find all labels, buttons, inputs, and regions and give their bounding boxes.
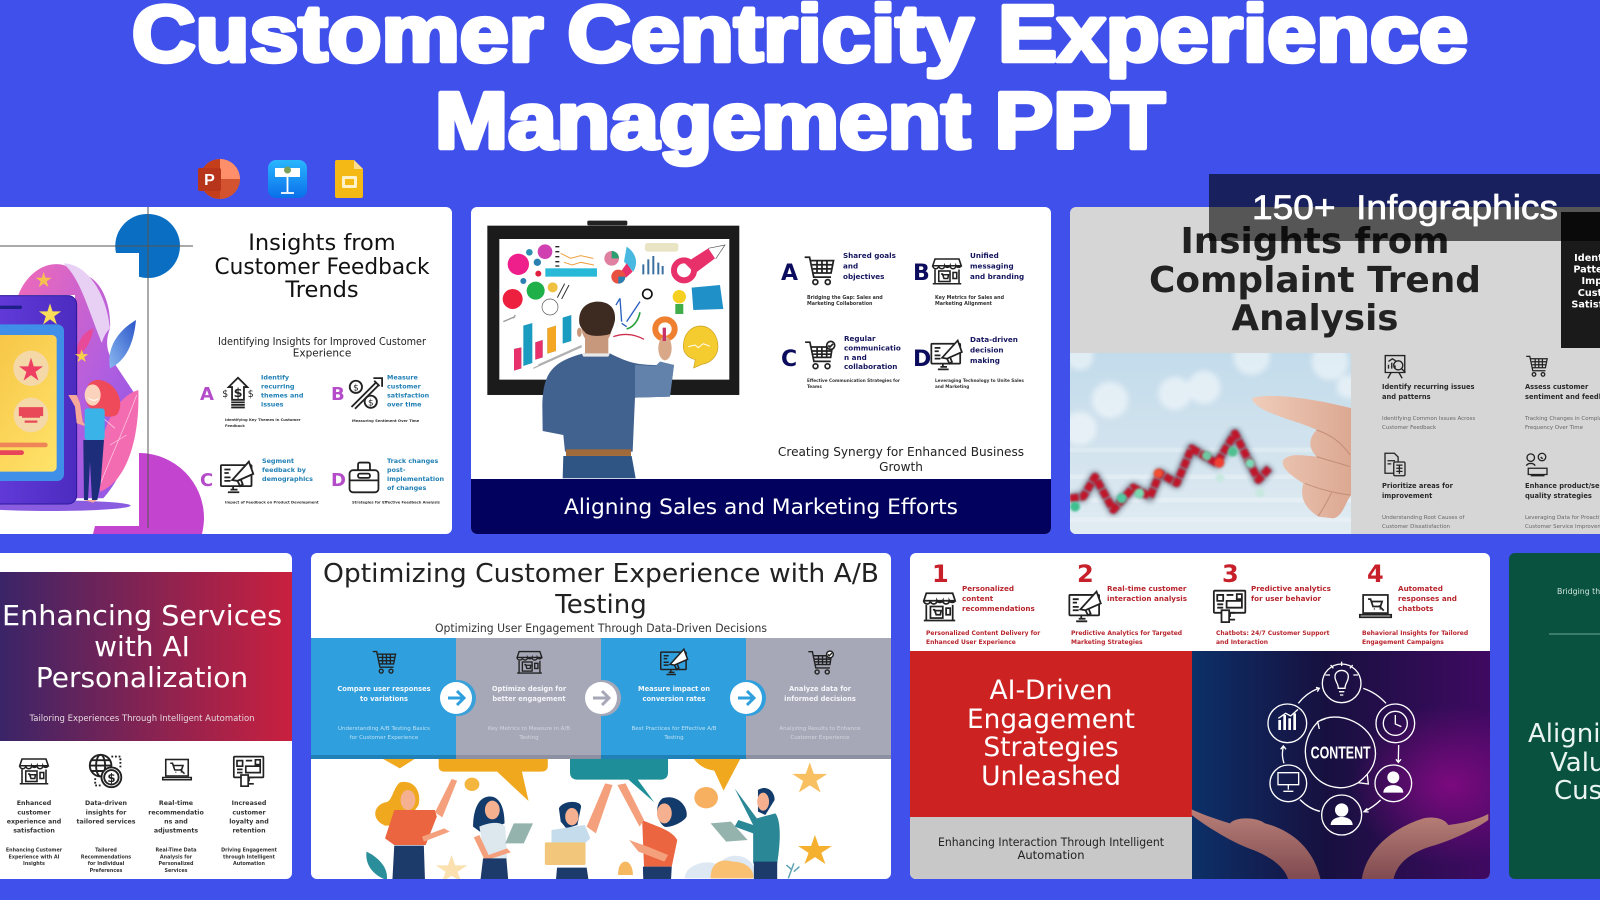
item: prioritize areas: Customer Dissatisfaction bbox=[1382, 524, 1450, 530]
item D: decision bbox=[970, 346, 1004, 354]
decorative blue quarter shape bbox=[115, 214, 180, 278]
column: customer loyalty: retention bbox=[232, 828, 266, 834]
item B: Measuring Sentiment Over Time bbox=[352, 419, 420, 423]
item B: B bbox=[331, 384, 345, 405]
icon: Keynote bbox=[268, 160, 307, 198]
heading: Customer Feedback bbox=[214, 254, 430, 280]
photo: content cycle over hands bbox=[1192, 651, 1550, 880]
item C bbox=[200, 457, 319, 504]
column: customer loyalty: Driving Engagement bbox=[221, 848, 278, 854]
column: data-driven insights: Tailored bbox=[95, 848, 117, 854]
item: assess customer sentiment bbox=[1524, 356, 1600, 431]
item: prioritize areas: Understanding Root Causes of bbox=[1382, 515, 1465, 521]
step 4 bbox=[746, 638, 891, 759]
step 2: Testing bbox=[518, 735, 539, 741]
heading bbox=[323, 559, 879, 620]
arrow 2 bbox=[585, 680, 621, 716]
step 2: Real-time customer bbox=[1107, 584, 1187, 593]
column: real-time recommendations bbox=[148, 760, 204, 874]
step 2: Key Metrics to Measure in A/B bbox=[488, 726, 570, 732]
item B: B bbox=[913, 261, 930, 286]
item D: D bbox=[913, 347, 931, 372]
step 2 bbox=[456, 638, 601, 759]
subtitle: Optimizing User Engagement Through Data-Driven Decisions bbox=[435, 621, 767, 635]
column: customer experience bbox=[6, 759, 63, 867]
item A: and bbox=[843, 262, 858, 270]
step 4: Behavioral Insights for Tailored bbox=[1362, 630, 1468, 637]
item C: feedback by bbox=[262, 466, 307, 474]
item D: post- bbox=[387, 466, 406, 474]
column: customer experience: customer bbox=[17, 810, 52, 816]
step 4: 4 bbox=[1367, 560, 1384, 588]
column: customer experience: Experience with AI bbox=[9, 854, 60, 860]
column: data-driven insights: insights for bbox=[86, 810, 127, 816]
item A: Feedback bbox=[225, 424, 245, 428]
item C: Effective Communication Strategies for bbox=[807, 378, 901, 383]
step 4: Analyze data for bbox=[789, 685, 852, 693]
black side box bbox=[1561, 212, 1600, 348]
red title block: Unleashed bbox=[981, 761, 1121, 792]
step 1: to variations bbox=[360, 695, 408, 703]
item C: n and bbox=[844, 353, 867, 362]
column: customer loyalty: through Intelligent bbox=[223, 854, 276, 860]
item C: Segment bbox=[262, 457, 294, 465]
step 2: Marketing Strategies bbox=[1071, 639, 1143, 646]
subtitle bbox=[778, 446, 1024, 471]
heading bbox=[4, 604, 281, 688]
red title block: Engagement bbox=[967, 704, 1135, 735]
panel: aligning value (cropped) bbox=[1509, 553, 1600, 879]
banner: 150+ infographics: 150+ Infographics bbox=[1252, 189, 1558, 227]
step 1 bbox=[311, 638, 456, 759]
step 1: Compare user responses bbox=[337, 685, 431, 693]
item A: A bbox=[781, 261, 798, 286]
item A: Bridging the Gap: Sales and bbox=[807, 295, 883, 301]
step 1: for Customer Experience bbox=[350, 735, 419, 741]
icon: PowerPoint bbox=[198, 159, 240, 199]
column: customer experience: Enhancing Customer bbox=[6, 848, 63, 854]
item B: Unified bbox=[970, 251, 999, 260]
column: real-time recommendations: recommendatio bbox=[148, 810, 204, 816]
item A bbox=[781, 251, 896, 307]
column: customer experience: Insights bbox=[23, 861, 45, 867]
heading: Personalization bbox=[36, 661, 248, 694]
panel: A/B testing bbox=[311, 553, 891, 882]
footer bar bbox=[471, 479, 1051, 534]
heading: Insights from bbox=[248, 230, 396, 256]
column: customer experience: experience and bbox=[7, 818, 61, 826]
item B: customer bbox=[387, 382, 422, 390]
item: enhance product quality bbox=[1525, 453, 1600, 530]
item B: messaging bbox=[970, 262, 1014, 270]
subtitle: Growth bbox=[879, 460, 923, 474]
heading: Enhancing Services bbox=[2, 599, 282, 632]
icon: Google Slides bbox=[335, 160, 363, 198]
step 3: conversion rates bbox=[642, 695, 706, 703]
item C: communicatio bbox=[844, 344, 901, 352]
item D bbox=[331, 457, 444, 504]
arrow 1 bbox=[440, 680, 476, 716]
gradient header band bbox=[0, 572, 292, 741]
illustration: man at whiteboard bbox=[487, 221, 739, 478]
column: data-driven insights: for Individual bbox=[88, 861, 125, 867]
column: customer experience: Enhanced bbox=[17, 800, 51, 807]
heading bbox=[1528, 719, 1600, 806]
step 3: Testing bbox=[663, 735, 684, 741]
heading: Testing bbox=[554, 590, 647, 620]
format icons row bbox=[198, 159, 363, 199]
column: real-time recommendations: Services bbox=[164, 868, 188, 874]
step 3: Measure impact on bbox=[638, 685, 710, 693]
step 3 bbox=[601, 638, 746, 759]
item B: Measure bbox=[387, 374, 419, 382]
step 1: Personalized bbox=[962, 584, 1014, 593]
item D: of changes bbox=[387, 484, 427, 492]
item D: implementation bbox=[387, 475, 444, 483]
column: real-time recommendations: ns and bbox=[164, 818, 188, 826]
item D: Data-driven bbox=[970, 335, 1018, 344]
item D: Leveraging Technology to Unite Sales bbox=[935, 378, 1024, 383]
step 3: for user behavior bbox=[1251, 594, 1322, 603]
column: customer experience: satisfaction bbox=[13, 828, 55, 834]
column: customer loyalty: Automation bbox=[233, 861, 265, 867]
column: data-driven insights: Recommendations bbox=[81, 854, 131, 860]
step 4: chatbots bbox=[1398, 604, 1433, 613]
item: identify recurring issues: Identifying Common Issues Across bbox=[1382, 416, 1475, 422]
item C: demographics bbox=[262, 475, 313, 483]
item: identify recurring issues: and patterns bbox=[1382, 393, 1431, 401]
step 3: Predictive analytics bbox=[1251, 584, 1331, 593]
item B: Key Metrics for Sales and bbox=[935, 295, 1005, 301]
title: Management PPT bbox=[435, 76, 1165, 165]
item B bbox=[913, 251, 1024, 307]
item D: Track changes bbox=[387, 457, 438, 465]
column: data-driven insights: Preferences bbox=[90, 868, 123, 874]
subtitle: Identifying Insights for Improved Customer bbox=[218, 336, 427, 348]
step 1 bbox=[924, 560, 1040, 646]
item C: C bbox=[781, 347, 797, 372]
column: customer loyalty: Increased bbox=[232, 800, 266, 807]
red title block bbox=[910, 651, 1192, 817]
red title block: Strategies bbox=[983, 732, 1119, 763]
step 1: recommendations bbox=[962, 604, 1035, 613]
item: identify recurring issues: Customer Feedback bbox=[1382, 425, 1437, 431]
item C bbox=[781, 334, 901, 389]
banner: 150+ infographics bbox=[1209, 174, 1600, 241]
column: data-driven insights bbox=[76, 755, 136, 874]
item A: objectives bbox=[843, 272, 884, 281]
step 4: Customer Experience bbox=[790, 735, 850, 741]
step 1: content bbox=[962, 594, 994, 603]
item D: D bbox=[331, 470, 346, 491]
heading: Analysis bbox=[1232, 298, 1398, 339]
item D: and Marketing bbox=[935, 384, 969, 389]
step 4 bbox=[1360, 560, 1468, 646]
item B: satisfaction bbox=[387, 392, 430, 400]
step 4: informed decisions bbox=[784, 695, 856, 703]
column: real-time recommendations: Real-time bbox=[159, 800, 193, 807]
item A: themes and bbox=[261, 392, 304, 400]
step 3 bbox=[1214, 560, 1331, 646]
item: assess customer sentiment: Frequency Over Time bbox=[1525, 425, 1584, 431]
step 1: Personalized Content Delivery for bbox=[926, 630, 1040, 637]
step 4: Analyzing Results to Enhance bbox=[779, 726, 861, 732]
item: identify recurring issues: Identify recurring issues bbox=[1382, 383, 1475, 391]
panel: complaint trend analysis bbox=[1063, 207, 1600, 537]
step 3: 3 bbox=[1222, 560, 1239, 588]
step 2: better engagement bbox=[492, 695, 566, 703]
photo: chart and pointing hand bbox=[1070, 353, 1351, 534]
decorative purple quarter shape bbox=[93, 453, 204, 534]
column: customer loyalty bbox=[221, 757, 278, 867]
item C: Regular bbox=[844, 334, 876, 343]
step 1: Understanding A/B Testing Basics bbox=[338, 726, 430, 732]
step 2: Optimize design for bbox=[492, 685, 567, 693]
item C: Teams bbox=[807, 384, 822, 389]
heading bbox=[216, 233, 430, 298]
step 4: Engagement Campaigns bbox=[1362, 639, 1444, 646]
step 3: Chatbots: 24/7 Customer Support bbox=[1216, 630, 1330, 637]
step 1: 1 bbox=[932, 560, 949, 588]
step 2: 2 bbox=[1077, 560, 1094, 588]
grey subtitle block: Automation bbox=[1018, 848, 1084, 862]
item: assess customer sentiment: Assess customer bbox=[1525, 383, 1589, 391]
item: identify recurring issues bbox=[1382, 356, 1475, 431]
item B bbox=[331, 374, 430, 423]
column: real-time recommendations: adjustments bbox=[154, 828, 198, 834]
item A: issues bbox=[261, 400, 284, 408]
subtitle: Tailoring Experiences Through Intelligent Automation bbox=[29, 713, 255, 724]
item: prioritize areas: improvement bbox=[1382, 492, 1433, 500]
column: real-time recommendations: Analysis for bbox=[160, 854, 193, 860]
panel: aligning sales and marketing bbox=[471, 207, 1051, 534]
subtitle: Creating Synergy for Enhanced Business bbox=[778, 445, 1024, 459]
heading: Insights from bbox=[1180, 221, 1450, 262]
step 4: Automated bbox=[1398, 584, 1443, 593]
item A bbox=[200, 374, 304, 428]
column: customer loyalty: customer bbox=[232, 810, 267, 816]
item: enhance product quality: quality strategies bbox=[1525, 492, 1592, 500]
item C: collaboration bbox=[844, 362, 897, 371]
item C: Impact of Feedback on Product Development bbox=[225, 500, 319, 504]
column: data-driven insights: Data-driven bbox=[85, 800, 127, 807]
item: prioritize areas: Prioritize areas for bbox=[1382, 482, 1454, 490]
step 3: Best Practices for Effective A/B bbox=[632, 726, 717, 732]
item A: Identify bbox=[261, 374, 290, 382]
icon: PowerPoint: P bbox=[204, 172, 215, 189]
red title block: AI-Driven bbox=[990, 675, 1112, 706]
column: customer loyalty: loyalty and bbox=[229, 818, 269, 826]
heading: Complaint Trend bbox=[1149, 260, 1481, 301]
subtitle: Experience bbox=[293, 348, 351, 360]
panel: customer feedback trends bbox=[0, 207, 452, 534]
illustration: team with speech bubbles bbox=[366, 759, 832, 882]
panel: AI-driven engagement bbox=[910, 553, 1550, 880]
column: data-driven insights: tailored services bbox=[76, 818, 136, 826]
step 1: Enhanced User Experience bbox=[926, 639, 1016, 646]
item A: Shared goals bbox=[843, 251, 896, 260]
item A: A bbox=[200, 384, 214, 405]
column: real-time recommendations: Real-Time Data bbox=[155, 848, 197, 854]
photo: content cycle over hands: CONTENT bbox=[1311, 743, 1371, 763]
grey subtitle block bbox=[910, 817, 1192, 879]
step 2 bbox=[1069, 560, 1187, 646]
footer title: Aligning Sales and Marketing Efforts bbox=[564, 495, 958, 519]
heading: Trends bbox=[284, 277, 359, 303]
item A: Marketing Collaboration bbox=[807, 301, 873, 307]
divider bbox=[1549, 633, 1600, 635]
item D: making bbox=[970, 356, 1000, 365]
step 3: and Interaction bbox=[1216, 639, 1268, 646]
item D bbox=[913, 335, 1024, 389]
item A: recurring bbox=[261, 382, 295, 390]
item B: and branding bbox=[970, 272, 1024, 281]
step 2: Predictive Analytics for Targeted bbox=[1071, 630, 1182, 637]
panel: AI personalization bbox=[0, 553, 292, 879]
item C: C bbox=[200, 470, 213, 491]
item D: Strategies for Effective Feedback Analysis bbox=[352, 500, 441, 504]
grey subtitle block: Enhancing Interaction Through Intelligent bbox=[938, 835, 1164, 849]
title bbox=[132, 0, 1468, 165]
heading: with AI bbox=[94, 630, 190, 663]
guide lines bbox=[0, 207, 193, 528]
item: prioritize areas bbox=[1382, 453, 1465, 530]
item B: Marketing Alignment bbox=[935, 301, 993, 307]
heading: Optimizing Customer Experience with A/B bbox=[323, 559, 879, 589]
subtitle bbox=[218, 336, 427, 360]
step 2: interaction analysis bbox=[1107, 594, 1187, 603]
arrow 3 bbox=[730, 680, 766, 716]
item B: over time bbox=[387, 400, 422, 408]
illustration: phone and person bbox=[0, 263, 138, 511]
column: real-time recommendations: Personalized bbox=[158, 861, 194, 867]
item A: Identifying Key Themes in Customer bbox=[225, 418, 301, 422]
heading bbox=[1149, 221, 1481, 339]
step 4: responses and bbox=[1398, 594, 1457, 603]
